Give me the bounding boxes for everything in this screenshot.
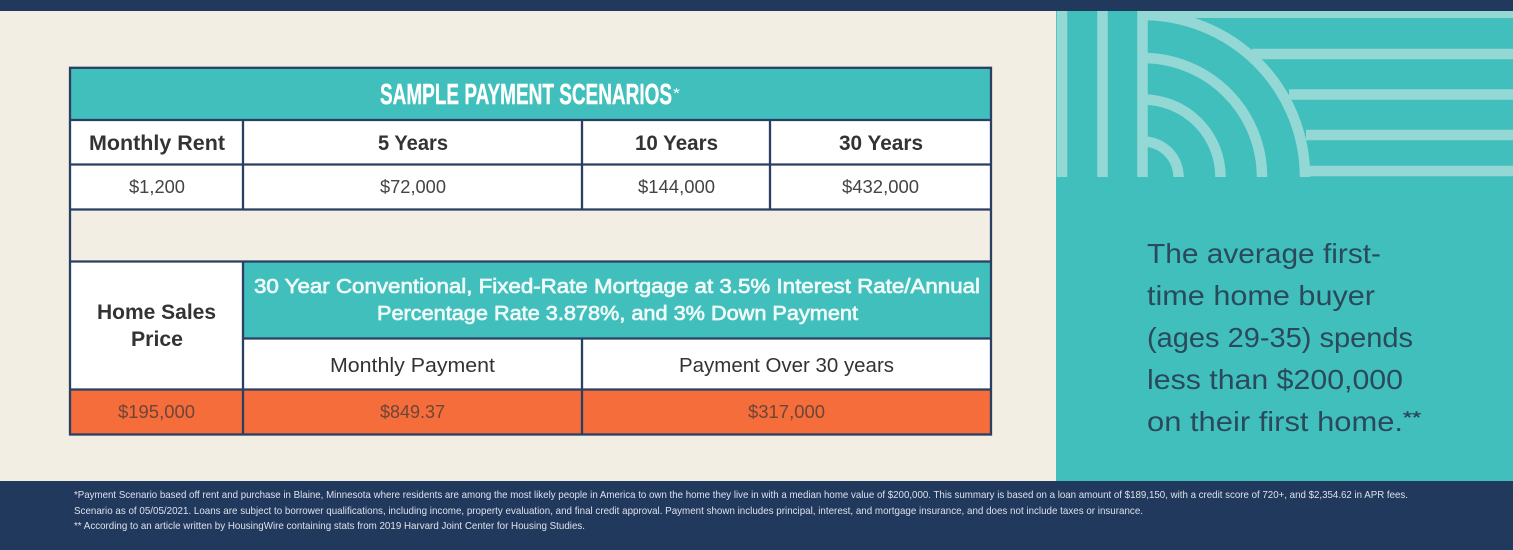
orange values row: $849.37 [380,402,445,422]
home sales price heading [97,301,216,351]
sidebar statement text: The average first- [1147,238,1381,269]
footnotes: *Payment Scenario based off rent and purchase in Blaine, Minnesota where residents are among the most likely people in America to own the home they live in with a median home value of $200,000. This summary is based on a loan amount of $189,150, with a credit score of 720+, and $2,354.62 in APR fees. [74,490,1408,501]
panel: footer [0,481,1513,550]
mortgage terms heading: Percentage Rate 3.878%, and 3% Down Payment [377,303,858,325]
payment column headings: Monthly Payment [330,355,495,377]
rent header row: 5 Years [378,132,448,155]
orange values row [118,402,825,422]
table title: SAMPLE PAYMENT SCENARIOS [380,79,672,111]
mortgage terms heading [254,276,980,325]
rent values row: $1,200 [129,177,185,197]
sidebar statement text: ** [1403,408,1422,427]
top navy band [0,0,1513,11]
orange values row: $195,000 [118,402,195,422]
sidebar statement text: (ages 29-35) spends [1147,322,1413,353]
rent header row [89,132,923,155]
mortgage terms heading: 30 Year Conventional, Fixed-Rate Mortgage at 3.5% Interest Rate/Annual [254,276,980,298]
footnotes [74,490,1408,532]
icon: concentric arcs and lines pattern [1062,11,1513,177]
sidebar statement text: less than $200,000 [1147,364,1403,395]
orange values row: $317,000 [748,402,825,422]
sidebar statement text: time home buyer [1147,280,1375,311]
table title [380,79,680,111]
rent values row [129,177,919,197]
footnotes: ** According to an article written by HousingWire containing stats from 2019 Harvard Joint Center for Housing Studies. [74,521,585,532]
panel: payment table [70,68,991,435]
rent values row: $144,000 [638,177,715,197]
rent values row: $72,000 [380,177,446,197]
table title: * [673,85,680,102]
rent header row: 10 Years [635,132,718,155]
panel: teal sidebar [1056,11,1513,481]
payment column headings: Payment Over 30 years [679,355,894,377]
rent header row: 30 Years [839,132,923,155]
home sales price heading: Price [131,328,183,351]
sidebar statement text: on their first home. [1147,406,1403,437]
rent values row: $432,000 [842,177,919,197]
rent header row: Monthly Rent [89,132,225,155]
sidebar statement text [1147,238,1422,437]
home sales price heading: Home Sales [97,301,216,324]
footnotes: Scenario as of 05/05/2021. Loans are subject to borrower qualifications, including income, property evaluation, and final credit approval. Payment shown includes principal, interest, and mortgage insurance, and does not include taxes or insurance. [74,506,1143,517]
payment column headings [330,355,894,377]
